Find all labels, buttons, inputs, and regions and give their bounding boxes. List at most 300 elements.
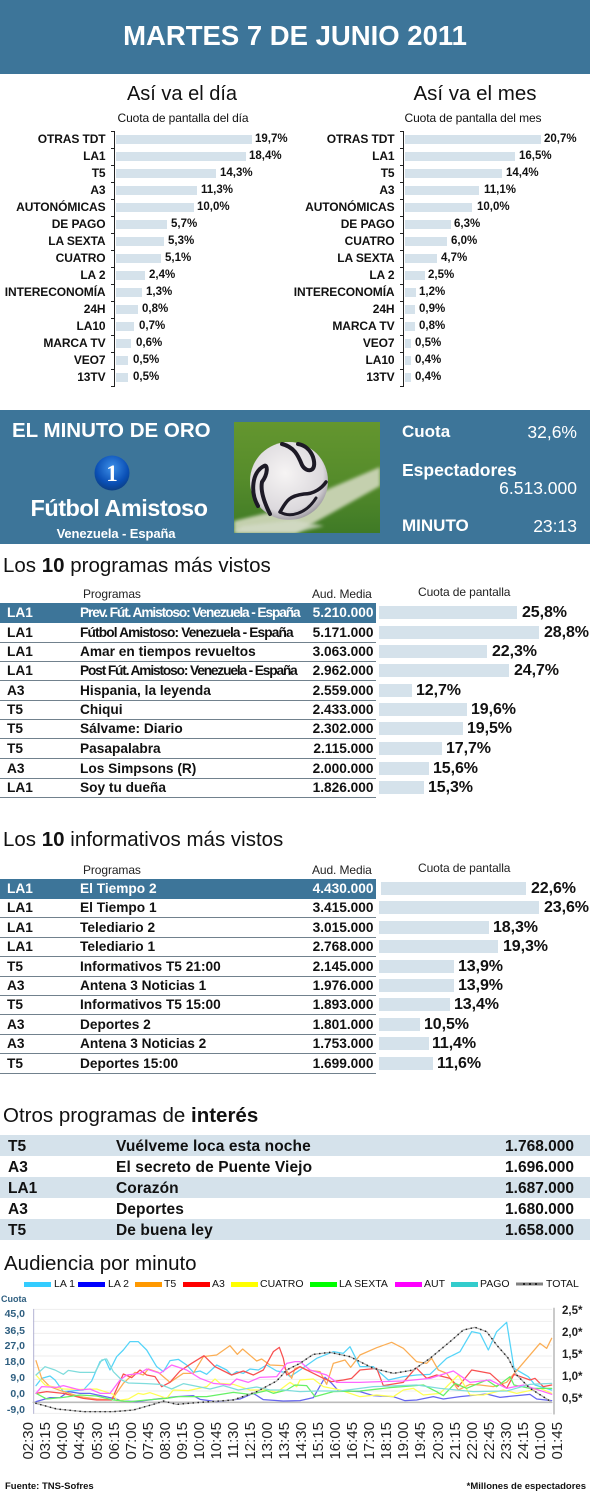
heading: los 10 programas: Los 10 programas más vistos (3, 554, 271, 577)
left axis values: 0,0 (10, 1388, 25, 1400)
chart legend: LA 1 (54, 1278, 75, 1290)
bar: INTERECONOMÍA: INTERECONOMÍA (294, 285, 394, 299)
bar: AUTONÓMICAS: 10,0% (477, 201, 510, 213)
chart legend: PAGO (480, 1278, 510, 1290)
row 1: 5.210.000 (313, 605, 374, 620)
row: corazón: 1.687.000 (505, 1180, 574, 1197)
subtitle: mes: Cuota de pantalla del mes (405, 111, 541, 125)
time axis labels: 20:30 (430, 1422, 446, 1460)
left axis values (0, 1300, 30, 1418)
chart legend: TOTAL (546, 1278, 579, 1290)
bar: LA10: 0,7% (139, 320, 165, 332)
icon: la 1 logo: 1 (106, 461, 118, 486)
row 4: LA1 (7, 939, 33, 954)
row 5 (0, 680, 590, 700)
bar: VEO7: VEO7 (74, 353, 106, 367)
row 2: 5.171.000 (313, 624, 374, 640)
bar: LA SEXTA (48, 234, 194, 248)
row 6: Chiqui (80, 702, 123, 717)
stat: cuota: 32,6% (527, 422, 577, 442)
bar: MARCA TV (43, 336, 162, 350)
bar: A3: A3 (379, 183, 394, 197)
right axis values: 1,0* (562, 1370, 582, 1382)
bar: 13TV: 0,4% (415, 371, 441, 383)
row 9 (0, 758, 590, 778)
row: de buena ley: T5 (8, 1222, 26, 1239)
row 3 (0, 918, 590, 937)
bar: 24H: 0,8% (142, 303, 168, 315)
row 5: 2.559.000 (313, 682, 374, 698)
bar: DE PAGO: DE PAGO (341, 217, 394, 231)
right axis values (556, 1300, 590, 1410)
program name: Fútbol Amistoso (30, 495, 208, 521)
stat: minuto (402, 516, 577, 536)
row 3 (0, 642, 590, 662)
row 5: A3 (7, 682, 24, 698)
row 9 (0, 1034, 590, 1054)
row: el secreto de puente viejo (0, 1156, 590, 1177)
time axis labels: 16:00 (327, 1422, 344, 1460)
row 3: LA1 (7, 644, 33, 659)
left axis values: 27,0 (5, 1340, 25, 1352)
row 5: T5 (7, 958, 23, 974)
row: vuélveme loca: 1.768.000 (505, 1138, 574, 1155)
stat: espectadores: 6.513.000 (499, 478, 577, 498)
time axis labels: 05:30 (88, 1422, 106, 1460)
row 3: Telediario 2 (80, 920, 155, 934)
row: el secreto de puente viejo: A3 (8, 1159, 28, 1176)
row 8: 10,5% (424, 1016, 469, 1032)
bar: CUATRO: CUATRO (345, 234, 394, 248)
left axis values: -9,0 (7, 1404, 25, 1416)
row 8: 1.801.000 (313, 1016, 374, 1032)
time axis labels: 01:45 (549, 1422, 566, 1460)
row 7: 1.893.000 (313, 997, 374, 1012)
axis: mes (403, 131, 404, 387)
row 5: 2.145.000 (313, 958, 374, 974)
bar: T5: T5 (381, 166, 394, 180)
row 7: 19,5% (467, 720, 512, 737)
row 8: T5 (7, 741, 23, 756)
bar: T5 (92, 166, 253, 180)
row 10: 1.826.000 (313, 780, 374, 795)
bar: LA 2 (369, 268, 454, 282)
heading: los 10 informativos: Los 10 informativos más vistos (3, 828, 283, 851)
bar: VEO7 (363, 336, 441, 350)
bar: 24H: 24H (373, 302, 394, 316)
row 2: 3.415.000 (313, 900, 374, 915)
row 10: T5 (7, 1056, 23, 1071)
row 7: 13,4% (454, 996, 499, 1013)
chart legend: A3 (212, 1278, 225, 1290)
bar: T5: 14,3% (220, 167, 253, 179)
row 6: A3 (7, 978, 24, 993)
time axis labels: 09:15 (174, 1422, 191, 1460)
bar: 24H: 0,9% (419, 303, 445, 315)
row 2 (0, 622, 590, 642)
stat: espectadores: Espectadores (402, 460, 517, 480)
row 4: Post Fút. Amistoso: Venezuela - España (80, 663, 297, 678)
row 4: 2.768.000 (313, 939, 374, 954)
right axis values: 2,0* (562, 1326, 582, 1338)
stat: minuto: MINUTO (402, 516, 469, 535)
time axis labels: 02:30 (20, 1422, 37, 1460)
row: vuélveme loca: T5 (8, 1138, 26, 1155)
row 6 (0, 700, 590, 720)
row 5: Informativos T5 21:00 (80, 958, 221, 974)
row 9: Los Simpsons (R) (80, 760, 196, 776)
row 8: Pasapalabra (80, 741, 161, 756)
bar: INTERECONOMÍA (5, 285, 172, 299)
bar: AUTONÓMICAS (305, 200, 510, 214)
bar: OTRAS TDT: 19,7% (255, 133, 288, 145)
chart legend (0, 1276, 590, 1292)
bar: 24H: 24H (84, 302, 106, 316)
bar: LA1: LA1 (83, 149, 106, 163)
bar: LA 2 (80, 268, 175, 282)
row: deportes: A3 (8, 1201, 28, 1218)
time axis labels: 22:00 (464, 1422, 481, 1460)
bar: A3: 11,3% (201, 184, 233, 196)
chart legend: T5 (164, 1278, 176, 1290)
row 10: LA1 (7, 780, 33, 795)
heading: otros programas de interés: Otros programas de interés (3, 1104, 258, 1127)
table header: cuota de pantalla: Cuota de pantalla (418, 585, 510, 599)
row 7: 2.302.000 (313, 721, 374, 736)
row 4: 24,7% (514, 662, 559, 679)
row 2: LA1 (7, 624, 33, 640)
row 1: 25,8% (522, 604, 567, 621)
source note: Fuente: TNS-Sofres (5, 1481, 94, 1492)
time axis labels: 18:15 (378, 1422, 395, 1460)
bar: A3: A3 (90, 183, 106, 197)
row 10: Soy tu dueña (80, 780, 166, 795)
table: los 10 informativos (0, 879, 590, 1074)
bar: T5: T5 (92, 166, 106, 180)
row 3: 18,3% (493, 918, 538, 936)
bar: CUATRO (345, 234, 477, 248)
bar: OTRAS TDT: OTRAS TDT (38, 132, 106, 146)
bar: INTERECONOMÍA: 1,3% (146, 286, 172, 298)
bar: A3 (90, 183, 233, 197)
bar: 24H (84, 302, 168, 316)
bar: 13TV (77, 370, 159, 384)
row 3: Amar en tiempos revueltos (80, 644, 256, 659)
time axis labels: 11:30 (225, 1422, 242, 1458)
time axis labels: 15:15 (310, 1422, 327, 1460)
row 5: 13,9% (458, 958, 503, 974)
row 6: T5 (7, 702, 23, 717)
row 4: 2.962.000 (313, 663, 374, 678)
time axis labels: 10:45 (208, 1422, 225, 1460)
table header: programas: Programas (83, 587, 141, 601)
left axis label: cuota: Cuota (1, 1294, 26, 1304)
bar: LA1 (372, 149, 552, 163)
time axis labels: 04:45 (71, 1422, 88, 1460)
bar: CUATRO: CUATRO (56, 251, 106, 265)
title banner (0, 0, 590, 74)
row: corazón: Corazón (116, 1180, 179, 1197)
bar: AUTONÓMICAS: AUTONÓMICAS (305, 200, 394, 214)
stat: cuota: Cuota (402, 422, 450, 441)
units note: *Millones de espectadores (467, 1481, 586, 1492)
row 9: 11,4% (432, 1035, 476, 1052)
photo: football on grass (234, 422, 380, 533)
bar: LA 2: LA 2 (369, 268, 394, 282)
row 10: 15,3% (428, 779, 473, 796)
row 3: LA1 (7, 920, 33, 934)
row 8: 17,7% (446, 740, 491, 757)
program detail: Venezuela - España (57, 526, 175, 541)
right axis values: 0,5* (562, 1393, 582, 1405)
row 6: 19,6% (471, 701, 516, 718)
row 1 (0, 603, 567, 623)
time axis labels: 19:45 (412, 1422, 429, 1460)
row 7: Sálvame: Diario (80, 721, 183, 736)
bar: MARCA TV: 0,6% (136, 337, 162, 349)
subtitle: día: Cuota de pantalla del día (118, 111, 248, 125)
bar: T5: 14,4% (506, 167, 539, 179)
table header: cuota de pantalla: Cuota de pantalla (418, 861, 510, 875)
chart legend: AUT (424, 1278, 445, 1290)
chart legend: CUATRO (260, 1278, 304, 1290)
table: los 10 programas (0, 603, 589, 798)
row 8: A3 (7, 1016, 24, 1032)
bar: LA SEXTA: LA SEXTA (48, 234, 106, 248)
row 6: 2.433.000 (313, 702, 374, 717)
bar: 24H (373, 302, 445, 316)
time axis labels: 19:00 (395, 1422, 412, 1460)
stat: espectadores (402, 460, 577, 498)
bar: MARCA TV: MARCA TV (43, 336, 106, 350)
row 2: Fútbol Amistoso: Venezuela - España (80, 624, 293, 640)
heading: mes: Así va el mes (413, 82, 537, 105)
row: el secreto de puente viejo: 1.696.000 (505, 1159, 574, 1176)
bar: LA10 (366, 353, 441, 367)
bar: MARCA TV (332, 319, 445, 333)
bar: A3 (379, 183, 516, 197)
row: vuélveme loca: Vuélveme loca esta noche (116, 1138, 311, 1155)
row 9: Antena 3 Noticias 2 (80, 1036, 206, 1051)
row 7: Informativos T5 15:00 (80, 997, 221, 1012)
row 2 (0, 898, 590, 918)
bar: AUTONÓMICAS: 10,0% (197, 201, 230, 213)
bar: LA 2: 2,4% (149, 269, 175, 281)
table header: audiencia media: Aud. Media (312, 587, 372, 601)
bar: 13TV: 0,5% (133, 371, 159, 383)
row 3: 3.063.000 (313, 644, 374, 659)
panel: así va el día (5, 83, 288, 387)
bar: LA SEXTA (337, 251, 467, 265)
row 8 (0, 1014, 590, 1034)
row 1: 4.430.000 (313, 881, 374, 896)
row 9: 1.753.000 (313, 1036, 374, 1051)
bar: OTRAS TDT: 20,7% (544, 133, 577, 145)
row 5 (0, 956, 590, 976)
bar: LA SEXTA: LA SEXTA (337, 251, 394, 265)
bar: LA1: 16,5% (519, 150, 552, 162)
bar: LA10: LA10 (77, 319, 106, 333)
row: de buena ley: De buena ley (116, 1222, 213, 1239)
row: deportes (0, 1198, 590, 1219)
bar: VEO7: 0,5% (133, 354, 159, 366)
row 6: 13,9% (458, 977, 503, 994)
row 5: 12,7% (416, 682, 461, 698)
time axis labels: 21:15 (447, 1422, 464, 1460)
bar: 13TV (366, 370, 441, 384)
bar: 13TV: 13TV (366, 370, 394, 384)
row 4: LA1 (7, 663, 33, 678)
bar: OTRAS TDT: OTRAS TDT (327, 132, 394, 146)
row 8 (0, 739, 590, 758)
row 8: 2.115.000 (313, 741, 374, 756)
row 9: A3 (7, 760, 24, 776)
time axis labels: 10:00 (191, 1422, 208, 1460)
chart legend: LA 2 (108, 1278, 129, 1290)
row 7: T5 (7, 721, 23, 736)
bar: DE PAGO: 5,7% (171, 218, 197, 230)
bar: LA1 (83, 149, 282, 163)
bar: LA 2: LA 2 (80, 268, 106, 282)
heading: día: Así va el día (127, 83, 237, 105)
row 1: 22,6% (531, 880, 576, 897)
row: de buena ley (0, 1219, 590, 1240)
chart legend: LA SEXTA (339, 1278, 388, 1290)
bar: LA SEXTA: 5,3% (168, 235, 194, 247)
row: deportes: Deportes (116, 1201, 184, 1218)
time axis labels: 13:00 (259, 1422, 276, 1460)
bar: LA 2: 2,5% (428, 269, 454, 281)
row: corazón (0, 1177, 590, 1198)
bar: LA10: LA10 (366, 353, 394, 367)
bar: LA1: 18,4% (249, 150, 282, 162)
title: MARTES 7 DE JUNIO 2011 (123, 20, 467, 51)
bar: CUATRO: 5,1% (165, 252, 191, 264)
row 10: 1.699.000 (313, 1056, 374, 1071)
row: corazón: LA1 (8, 1180, 37, 1197)
bar: MARCA TV: MARCA TV (332, 319, 394, 333)
heading: audiencia por minuto: Audiencia por minuto (4, 1252, 197, 1275)
bar: LA SEXTA: 4,7% (441, 252, 467, 264)
row 5: Hispania, la leyenda (80, 682, 211, 698)
row 7 (0, 995, 590, 1014)
table: otros programas (0, 1135, 590, 1241)
bar: VEO7 (74, 353, 159, 367)
row 7: T5 (7, 997, 23, 1012)
row 1 (0, 879, 590, 898)
row: deportes: 1.680.000 (505, 1201, 574, 1218)
time axis labels: 07:00 (123, 1422, 140, 1460)
row 6: 1.976.000 (313, 978, 374, 993)
line plot (0, 1295, 590, 1420)
bar: LA10: 0,4% (415, 354, 441, 366)
time axis labels: 16:45 (344, 1422, 361, 1460)
row: el secreto de puente viejo: El secreto de Puente Viejo (116, 1159, 312, 1176)
row 1: Prev. Fút. Amistoso: Venezuela - España (80, 605, 300, 620)
table header: programas: Programas (83, 863, 141, 877)
bar: CUATRO (56, 251, 191, 265)
row 10: 11,6% (437, 1055, 481, 1072)
row 4 (0, 937, 590, 956)
row 1: El Tiempo 2 (80, 881, 157, 896)
bar: OTRAS TDT (327, 132, 577, 146)
bar: MARCA TV: 0,8% (419, 320, 445, 332)
bar: INTERECONOMÍA: INTERECONOMÍA (5, 285, 106, 299)
time axis labels: 12:15 (242, 1422, 259, 1460)
bar: VEO7: VEO7 (363, 336, 394, 350)
row 2: El Tiempo 1 (80, 900, 157, 915)
row 2: 23,6% (544, 899, 589, 916)
row 9: A3 (7, 1036, 24, 1051)
bar: DE PAGO: 6,3% (454, 218, 480, 230)
time axis labels: 14:30 (293, 1422, 310, 1460)
row 2: LA1 (7, 900, 33, 915)
bar: T5 (380, 166, 539, 180)
row 8: Deportes 2 (80, 1016, 151, 1032)
time axis labels: 08:30 (157, 1422, 174, 1460)
time axis labels: 17:30 (361, 1422, 378, 1460)
time axis labels: 01:00 (532, 1422, 549, 1460)
icon: la 1 logo (94, 456, 130, 490)
time axis labels: 03:15 (37, 1422, 54, 1460)
bar: 13TV: 13TV (77, 370, 106, 384)
row 1: LA1 (7, 605, 33, 620)
heading: el minuto de oro: EL MINUTO DE ORO (12, 419, 211, 442)
left axis values: 18,0 (5, 1356, 25, 1368)
stat: minuto: 23:13 (533, 516, 577, 536)
right axis values: 1,5* (562, 1349, 582, 1361)
row 2: 28,8% (544, 624, 589, 640)
row 6: Antena 3 Noticias 1 (80, 978, 206, 993)
bar: INTERECONOMÍA: 1,2% (419, 286, 445, 298)
time axis labels: 23:30 (498, 1422, 515, 1460)
left axis values: 36,5 (5, 1325, 25, 1337)
time axis labels: 22:45 (481, 1422, 498, 1460)
bar: DE PAGO: DE PAGO (52, 217, 106, 231)
time axis labels: 04:00 (54, 1422, 71, 1460)
bar: AUTONÓMICAS (16, 200, 230, 214)
bar: VEO7: 0,5% (415, 337, 441, 349)
bar: LA1: LA1 (372, 149, 394, 163)
bar: DE PAGO (52, 217, 197, 231)
row 4 (0, 661, 590, 680)
axis: día (114, 131, 115, 387)
bar: DE PAGO (341, 217, 480, 231)
row 10 (0, 778, 590, 798)
time axis labels: 24:15 (515, 1422, 532, 1460)
bar: AUTONÓMICAS: AUTONÓMICAS (16, 200, 106, 214)
table header: audiencia media: Aud. Media (312, 863, 372, 877)
stat: cuota (402, 422, 577, 442)
row 1: LA1 (7, 881, 33, 896)
time axis labels: 13:45 (276, 1422, 293, 1460)
row 10 (0, 1054, 590, 1074)
row 9: 15,6% (433, 760, 478, 776)
row 3: 22,3% (492, 643, 537, 660)
row 3: 3.015.000 (313, 920, 374, 934)
bar: INTERECONOMÍA (294, 285, 445, 299)
row: de buena ley: 1.658.000 (505, 1222, 574, 1239)
time axis labels (0, 1420, 590, 1465)
row 4: Telediario 1 (80, 939, 155, 954)
bar: OTRAS TDT (38, 132, 288, 146)
time axis labels: 06:15 (106, 1422, 123, 1460)
panel: el minuto de oro (0, 410, 590, 544)
row 7 (0, 719, 590, 738)
row: vuélveme loca (0, 1135, 590, 1156)
bar: A3: 11,1% (484, 184, 516, 196)
right axis values: 2,5* (562, 1305, 582, 1317)
